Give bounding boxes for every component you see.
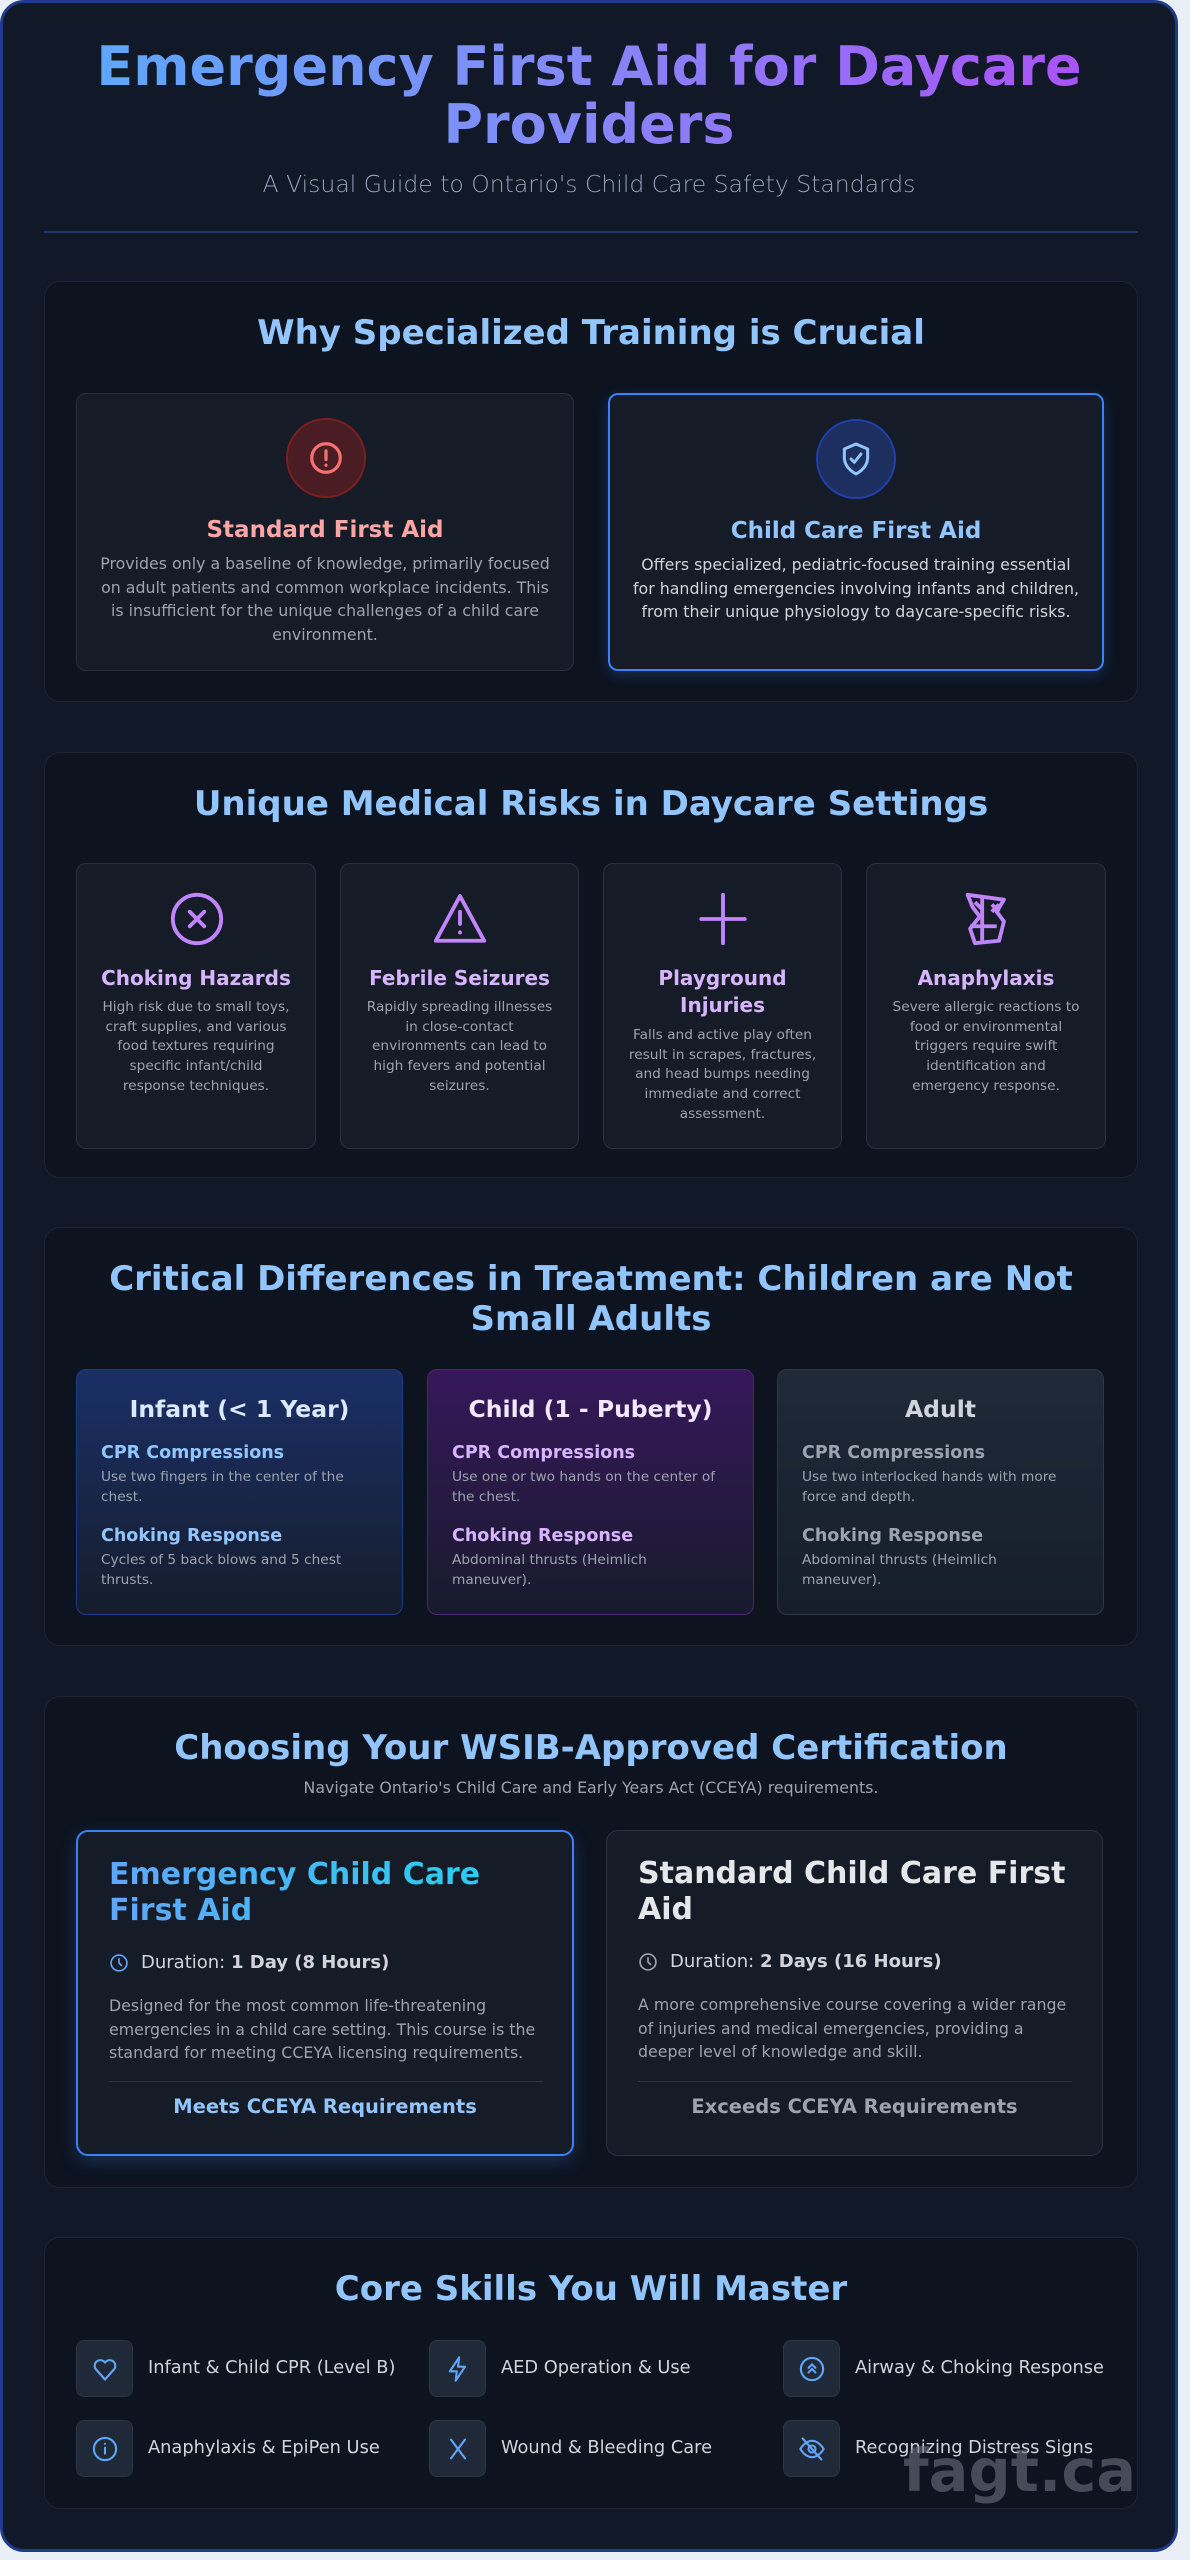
card: standard first aid [76, 393, 574, 671]
card text: Offers specialized, pediatric-focused training essential [641, 555, 1071, 574]
watermark: fagt.ca [903, 2436, 1136, 2505]
card: adult: Choking Response [802, 1526, 983, 1546]
title: Emergency Child Care [109, 1857, 480, 1892]
icon: allergy [966, 892, 1006, 946]
text: Falls and active play often [633, 1027, 812, 1043]
description: of injuries and medical emergencies, providing a [638, 2018, 1024, 2038]
skill: wound care: Wound & Bleeding Care [501, 2437, 712, 2458]
heading: core skills: Core Skills You Will Master [335, 2269, 847, 2309]
panel: why specialized training [44, 281, 1138, 702]
card: child: Use one or two hands on the center of [452, 1469, 715, 1485]
description: A more comprehensive course covering a wider range [638, 1995, 1066, 2014]
description: emergencies in a child care setting. This course is the [109, 2020, 535, 2038]
skill: distress signs: Recognizing Distress Signs [855, 2437, 1093, 2458]
title: Aid [638, 1892, 693, 1927]
panel: certification [44, 1696, 1138, 2188]
card: adult: force and depth. [802, 1489, 915, 1505]
card: child [427, 1369, 754, 1615]
card title: Standard First Aid [206, 517, 444, 543]
card: child: the chest. [452, 1489, 520, 1505]
card: adult: CPR Compressions [802, 1443, 985, 1463]
skill: airway: Airway & Choking Response [855, 2357, 1104, 2378]
card: standard child care [606, 1830, 1103, 2156]
skill: anaphylaxis: Anaphylaxis & EpiPen Use [148, 2437, 380, 2458]
skill: airway [783, 2340, 1104, 2397]
card: infant: Choking Response [101, 1526, 282, 1546]
icon: shield [816, 419, 896, 499]
card: adult [777, 1369, 1104, 1615]
skill: aed [429, 2340, 691, 2397]
duration: Duration: 1 Day (8 Hours) [141, 1952, 389, 1973]
title: Emergency First Aid for Daycare [96, 35, 1082, 98]
card: infant: chest. [101, 1489, 142, 1505]
text: and head bumps needing [635, 1066, 810, 1082]
card: infant: thrusts. [101, 1572, 153, 1588]
skill: cpr [76, 2340, 395, 2397]
card: infant [76, 1369, 403, 1615]
text: High risk due to small toys, [102, 999, 290, 1015]
heading: risks: Unique Medical Risks in Daycare Settings [194, 784, 988, 824]
card: adult: Use two interlocked hands with more [802, 1469, 1056, 1485]
title: Anaphylaxis [918, 966, 1054, 990]
card: child: maneuver). [452, 1572, 531, 1588]
text [629, 1027, 816, 1122]
skill: anaphylaxis [76, 2420, 380, 2477]
card: adult: Abdominal thrusts (Heimlich [802, 1552, 997, 1568]
text: environments can lead to [372, 1038, 547, 1054]
text: in close-contact [405, 1019, 514, 1035]
title: Injuries [680, 993, 765, 1017]
title: Playground [658, 966, 787, 990]
title: Providers [443, 93, 735, 156]
card: adult: maneuver). [802, 1572, 881, 1588]
text: identification and [926, 1058, 1046, 1074]
text: craft supplies, and various [105, 1019, 287, 1035]
description [109, 1996, 535, 2062]
icon: plus [699, 892, 747, 946]
card: child: Choking Response [452, 1526, 633, 1546]
text [102, 999, 290, 1094]
card: emergency child care [76, 1830, 574, 2156]
card: child: CPR Compressions [452, 1443, 635, 1463]
title [109, 1857, 529, 1929]
panel: core skills [44, 2237, 1138, 2509]
text: Rapidly spreading illnesses [367, 999, 552, 1015]
card text: on adult patients and common workplace incidents. This [101, 578, 549, 596]
icon: warning triangle [434, 894, 486, 943]
skill: wound care [429, 2420, 712, 2477]
text: food textures requiring [117, 1038, 275, 1054]
panel: unique medical risks [44, 752, 1138, 1178]
card: anaphylaxis [866, 863, 1106, 1149]
title: Choking Hazards [101, 966, 291, 990]
card text: Provides only a baseline of knowledge, primarily focused [100, 554, 550, 573]
panel: critical differences [44, 1227, 1138, 1646]
text: immediate and correct [645, 1086, 800, 1102]
icon: x circle [170, 892, 224, 946]
card text [633, 555, 1079, 621]
text [892, 999, 1080, 1094]
card: child care first aid [608, 393, 1104, 671]
description: deeper level of knowledge and skill. [638, 2042, 923, 2061]
title [638, 1856, 1065, 1927]
card text: for handling emergencies involving infants and children, [633, 578, 1079, 598]
icon: warning circle [286, 418, 366, 498]
card: child: Abdominal thrusts (Heimlich [452, 1552, 647, 1568]
skill: cpr: Infant & Child CPR (Level B) [148, 2357, 395, 2378]
text: food or environmental [910, 1019, 1062, 1035]
description: standard for meeting CCEYA licensing requirements. [109, 2043, 523, 2062]
title: Febrile Seizures [369, 966, 550, 990]
card: adult: Adult [905, 1395, 976, 1423]
card: infant: Cycles of 5 back blows and 5 chest [101, 1552, 341, 1568]
skill: distress signs [783, 2420, 1093, 2477]
card: choking hazards [76, 863, 316, 1149]
card text: from their unique physiology to daycare-specific risks. [641, 602, 1070, 621]
card: infant: Use two fingers in the center of the [101, 1469, 344, 1485]
card text: is insufficient for the unique challenges of a child care [111, 601, 539, 620]
card: infant: CPR Compressions [101, 1443, 284, 1463]
card text: environment. [272, 624, 378, 644]
card: playground injuries [603, 863, 842, 1149]
status: Exceeds CCEYA Requirements [691, 2095, 1018, 2118]
card: infant: Infant (< 1 Year) [130, 1395, 349, 1423]
title [0, 38, 1178, 154]
heading: differences [109, 1259, 1073, 1339]
text [367, 999, 552, 1094]
card: febrile seizures [340, 863, 579, 1149]
text: response techniques. [123, 1078, 269, 1094]
skill: aed: AED Operation & Use [501, 2357, 691, 2378]
heading: differences: Small Adults [470, 1299, 712, 1339]
card title: Child Care First Aid [731, 518, 981, 544]
card: child: Child (1 - Puberty) [469, 1395, 712, 1423]
text: emergency response. [912, 1078, 1060, 1094]
status: Meets CCEYA Requirements [173, 2095, 477, 2118]
title [658, 966, 787, 1017]
duration: Duration: 2 Days (16 Hours) [670, 1951, 942, 1972]
title: Standard Child Care First [638, 1856, 1065, 1891]
subtitle: A Visual Guide to Ontario's Child Care Safety Standards [263, 170, 915, 198]
text: Severe allergic reactions to [892, 999, 1080, 1015]
description: Designed for the most common life-threatening [109, 1996, 486, 2015]
text: high fevers and potential [373, 1058, 546, 1074]
heading: differences: Critical Differences in Treatment: Children are Not [109, 1259, 1073, 1299]
subheading: Navigate Ontario's Child Care and Early Years Act (CCEYA) requirements. [304, 1778, 878, 1797]
text: assessment. [680, 1106, 765, 1122]
text: seizures. [429, 1078, 490, 1094]
card text [100, 554, 550, 644]
text: triggers require swift [915, 1038, 1057, 1054]
description [638, 1995, 1066, 2061]
text: specific infant/child [130, 1058, 262, 1074]
text: result in scrapes, fractures, [629, 1047, 816, 1063]
heading: why: Why Specialized Training is Crucial [257, 313, 925, 353]
heading: certification: Choosing Your WSIB-Approved Certification [174, 1728, 1008, 1768]
title: First Aid [109, 1893, 252, 1928]
